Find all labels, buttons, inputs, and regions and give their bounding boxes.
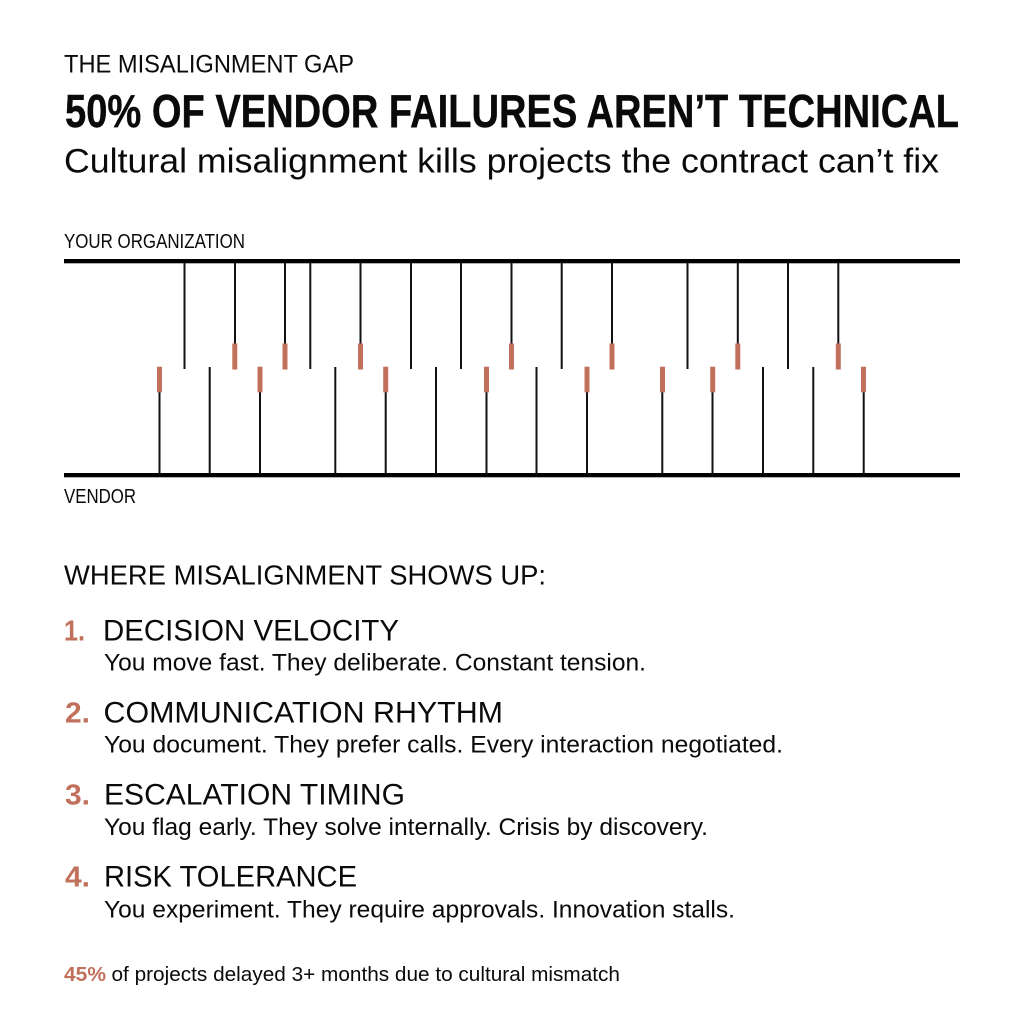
item 3: escalation timing: 3. (65, 780, 90, 812)
item 3: escalation timing: ESCALATION TIMING (104, 779, 405, 812)
item 1: decision velocity: 1. (64, 616, 85, 648)
item 4: risk tolerance (65, 861, 735, 924)
footnote statistic: of projects delayed 3+ months due to cultural mismatch (112, 963, 620, 986)
eyebrow: the misalignment gap: THE MISALIGNMENT GAP (64, 50, 354, 78)
item 1: decision velocity (64, 615, 646, 677)
misaligned markers: organization (232, 344, 841, 370)
misaligned markers: vendor (157, 367, 866, 392)
item 4: risk tolerance: RISK TOLERANCE (104, 861, 357, 894)
item 3: escalation timing: You flag early. They solve internally. Crisis by discovery. (104, 814, 708, 841)
item 1: decision velocity: You move fast. They deliberate. Constant tension. (104, 650, 646, 677)
item 4: risk tolerance: You experiment. They require approvals. Innovation stalls. (104, 896, 735, 924)
item 3: escalation timing (65, 779, 708, 841)
label: vendor: VENDOR (64, 485, 136, 508)
subtitle: Cultural misalignment kills projects the contract can’t fix (64, 143, 939, 181)
item 2: communication rhythm: 2. (65, 698, 90, 730)
item 1: decision velocity: DECISION VELOCITY (103, 615, 399, 648)
section heading: WHERE MISALIGNMENT SHOWS UP: (64, 559, 546, 590)
organization bar with ticks (64, 259, 960, 370)
footnote statistic: 45% (64, 963, 106, 986)
gap diagram: comb lines (64, 259, 960, 477)
label: your organization: YOUR ORGANIZATION (64, 230, 245, 253)
item 2: communication rhythm: You document. They prefer calls. Every interaction negotiated. (104, 732, 783, 758)
item 4: risk tolerance: 4. (65, 862, 90, 894)
item 2: communication rhythm (65, 696, 783, 758)
vendor bar with ticks (64, 367, 960, 477)
item 2: communication rhythm: COMMUNICATION RHYTHM (104, 696, 503, 730)
